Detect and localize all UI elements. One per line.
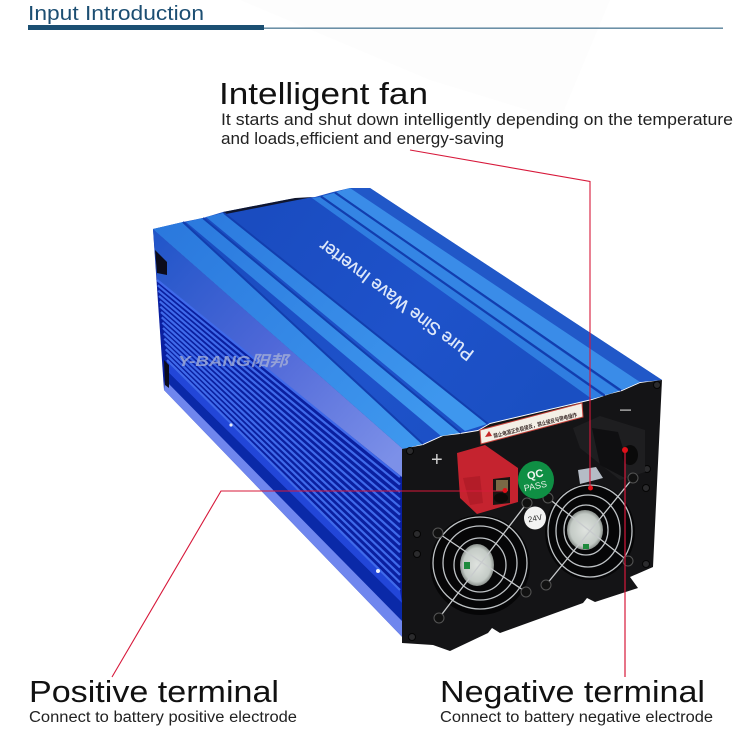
warning label [480,403,583,444]
24V sticker: 24V [527,512,544,524]
QC PASS sticker: QC [526,467,545,483]
label: negative terminal [440,674,713,726]
product: inverter [153,188,662,651]
label: positive terminal [29,674,297,726]
side face of inverter [153,229,408,643]
screws [406,382,660,640]
label: positive terminal: Positive terminal [29,674,279,709]
fan: right [541,473,638,590]
positive terminal cover [457,445,518,514]
minus sign [620,410,631,411]
faint background shape [240,0,610,120]
label: negative terminal: Negative terminal [440,674,705,709]
leader line: positive terminal [112,488,508,677]
small sticker [578,467,603,484]
heading block: Intelligent fan: and loads,efficient and energy-saving [221,130,504,148]
label: negative terminal: Connect to battery negative electrode [440,709,713,726]
heading block: Intelligent fan: Intelligent fan [219,76,428,111]
title underline [28,25,723,30]
watermark: Y-BANG: Y-BANG阳邦 [178,353,292,370]
fan: left [430,498,532,623]
negative terminal cover [573,416,645,480]
warning label: 禁止电源正负极接反，禁止接反与带电操作 [492,411,578,440]
heading block: Intelligent fan [219,76,733,148]
top face of inverter [153,188,662,449]
label: positive terminal: Connect to battery positive electrode [29,709,297,726]
24V sticker [524,506,546,530]
rotated product text: Pure Sine Wave Inverter [315,236,477,365]
plus sign: + [431,449,443,471]
front face of inverter [402,380,662,651]
QC PASS sticker [518,461,554,499]
QC PASS sticker: PASS [523,479,548,493]
title: Input Introduction: Input Introduction [28,3,204,25]
leader line: negative terminal [622,447,628,677]
leader line: intelligent fan [410,150,593,490]
heading block: Intelligent fan: It starts and shut down intelligently depending on the temperature [221,111,733,129]
